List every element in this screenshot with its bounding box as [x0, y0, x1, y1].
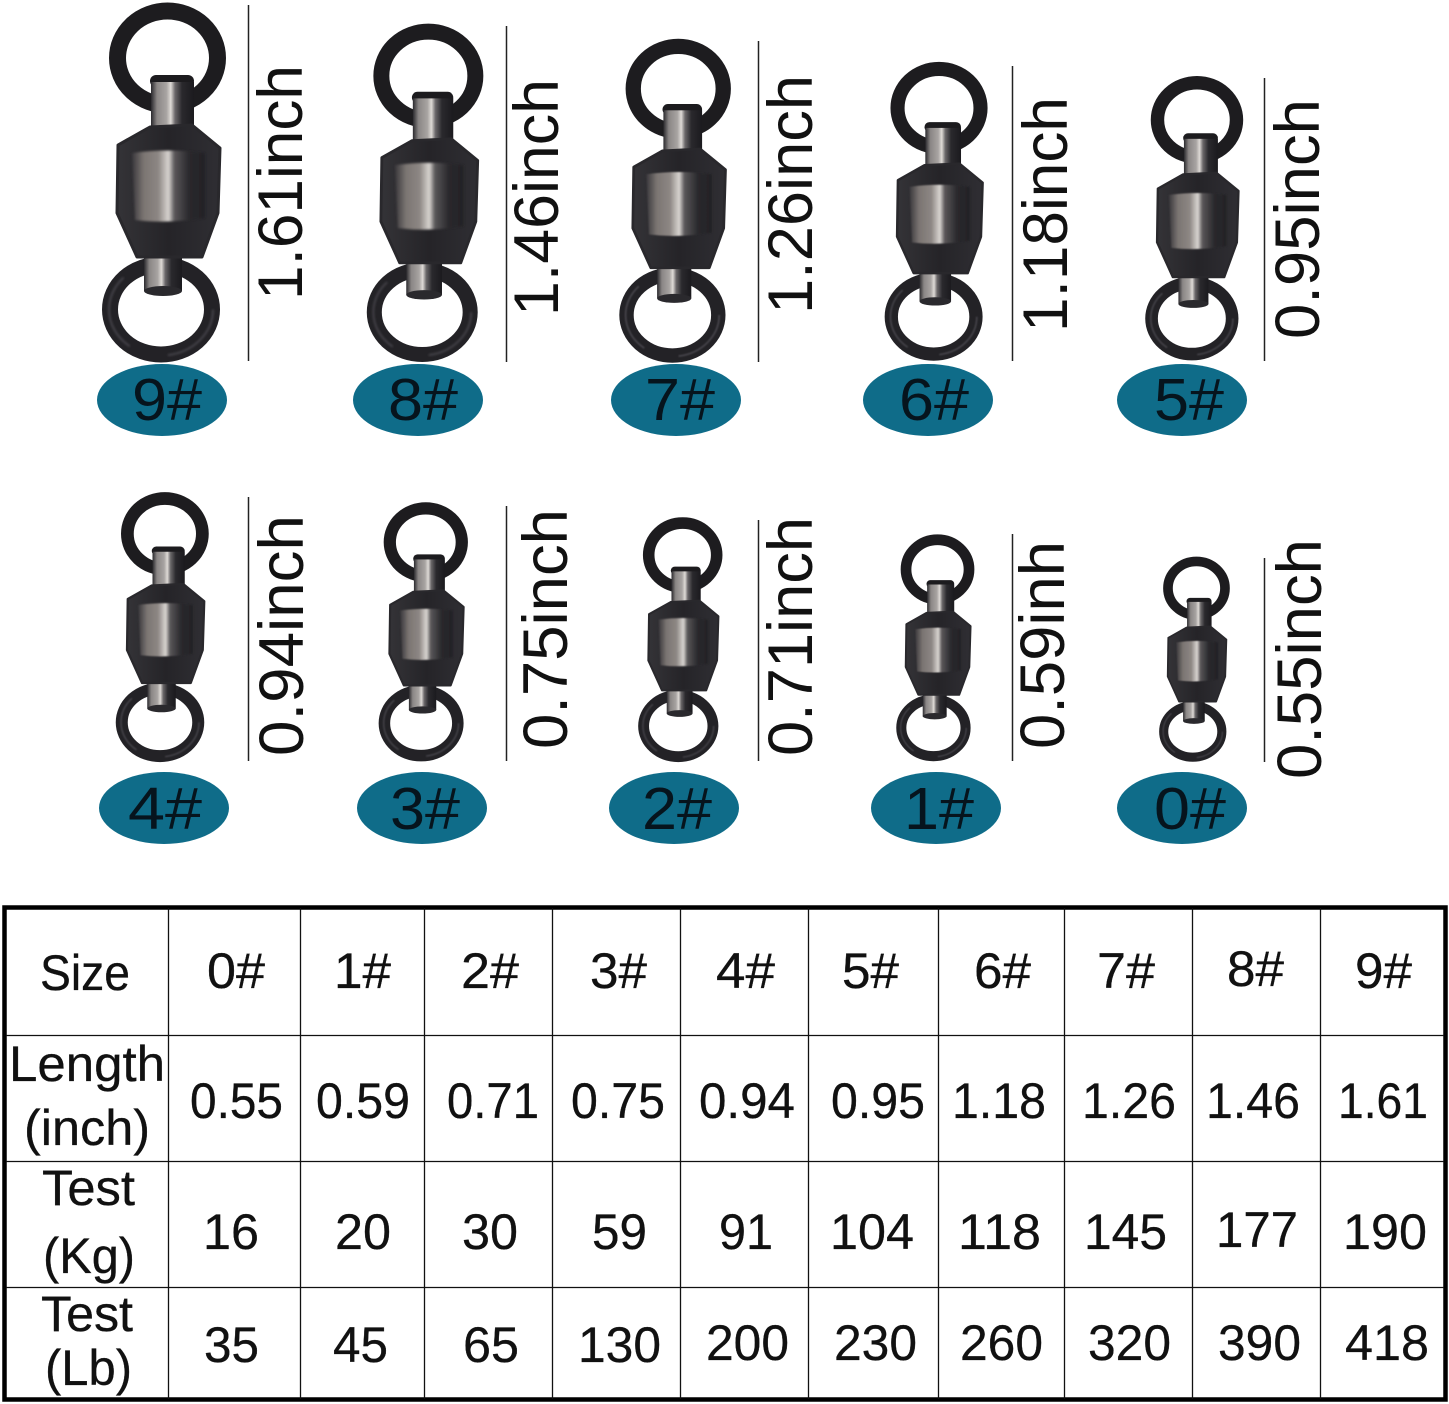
table row: length in inches: 0.75	[571, 1073, 665, 1129]
table row: test in pounds: 320	[1088, 1315, 1171, 1371]
table row: size: 7#	[1097, 943, 1155, 999]
table row: length in inches: 1.26	[1082, 1073, 1176, 1129]
table row: test in pounds: 200	[706, 1315, 789, 1371]
table row: test in pounds: 65	[463, 1317, 519, 1373]
table row: test in pounds: 45	[333, 1317, 388, 1373]
table row: test in pounds: 35	[204, 1317, 259, 1373]
table row: length in inches: 1.46	[1206, 1073, 1300, 1129]
table row: test in kilograms: (Kg)	[43, 1228, 135, 1284]
swivel 9#: image, length line, length label, size tag: 1.61inch	[246, 65, 316, 300]
table row: test in kilograms	[42, 1160, 1427, 1284]
table row: test in pounds: 418	[1345, 1315, 1429, 1371]
swivel 2#: image, length line, length label, size tag: 2#	[642, 776, 712, 842]
swivel 3#: image, length line, length label, size tag: 0.75inch	[511, 509, 581, 749]
table row: length in inches: 0.59	[316, 1073, 410, 1129]
table row: size: 6#	[974, 943, 1031, 999]
swivel 6#: image, length line, length label, size tag: 1.18inch	[1011, 97, 1081, 332]
table row: length in inches: 0.95	[831, 1073, 925, 1129]
table row: length in inches: 0.55	[190, 1073, 283, 1129]
table row: length in inches: (inch)	[24, 1100, 150, 1156]
table row: test in pounds: 260	[960, 1315, 1043, 1371]
swivel 4#: image, length line, length label, size tag	[99, 497, 317, 844]
table row: size: Size	[40, 945, 130, 1001]
swivel 7#: image, length line, length label, size tag	[611, 41, 826, 436]
table row: test in kilograms: 118	[958, 1204, 1041, 1260]
table row: test in pounds: Test	[41, 1286, 133, 1342]
table row: length in inches: 0.94	[699, 1073, 795, 1129]
swivel row two: sizes 4# to 0#	[99, 497, 1335, 844]
swivel 9#: image, length line, length label, size tag: 9#	[132, 367, 202, 433]
table row: test in pounds: 130	[578, 1317, 661, 1373]
specification table	[4, 908, 1446, 1400]
swivel 7#: image, length line, length label, size tag: 7#	[645, 367, 715, 433]
table row: length in inches	[9, 1036, 1428, 1156]
swivel 9#: image, length line, length label, size tag	[97, 5, 316, 436]
swivel 5#: image, length line, length label, size tag: 0.95inch	[1263, 99, 1333, 339]
swivel 8#: image, length line, length label, size tag: 8#	[388, 367, 458, 433]
table row: test in kilograms: 91	[719, 1204, 773, 1260]
swivel 6#: image, length line, length label, size tag	[863, 66, 1081, 436]
table row: size: 9#	[1355, 943, 1412, 999]
table row: test in kilograms: 177	[1216, 1202, 1298, 1258]
table row: length in inches: Length	[9, 1036, 165, 1092]
table row: test in kilograms: Test	[42, 1160, 135, 1216]
swivel 8#: image, length line, length label, size tag	[353, 26, 572, 436]
swivel 6#: image, length line, length label, size tag: 6#	[899, 367, 969, 433]
swivel row one: sizes 9# to 5#	[97, 5, 1333, 436]
swivel 4#: image, length line, length label, size tag: 4#	[128, 776, 202, 842]
table row: test in pounds: 230	[834, 1315, 917, 1371]
table row: size: 4#	[716, 943, 775, 999]
swivel 3#: image, length line, length label, size tag: 3#	[390, 776, 460, 842]
table row: test in kilograms: 20	[335, 1204, 391, 1260]
table row: size: 8#	[1227, 941, 1284, 997]
swivel 4#: image, length line, length label, size tag: 0.94inch	[247, 515, 317, 756]
swivel 1#: image, length line, length label, size tag: 1#	[904, 776, 974, 842]
swivel 7#: image, length line, length label, size tag: 1.26inch	[756, 75, 826, 314]
table row: test in pounds: (Lb)	[45, 1340, 132, 1396]
table row: test in kilograms: 30	[462, 1204, 518, 1260]
swivel 8#: image, length line, length label, size tag: 1.46inch	[502, 79, 572, 316]
swivel 5#: image, length line, length label, size tag	[1117, 78, 1333, 436]
table row: test in kilograms: 59	[592, 1204, 647, 1260]
table row: test in kilograms: 104	[830, 1204, 914, 1260]
swivel 2#: image, length line, length label, size tag: 0.71inch	[756, 517, 826, 756]
swivel 0#: image, length line, length label, size tag	[1117, 539, 1335, 844]
swivel 1#: image, length line, length label, size tag	[871, 534, 1078, 844]
swivel 1#: image, length line, length label, size tag: 0.59inh	[1008, 541, 1078, 749]
swivel 0#: image, length line, length label, size tag: 0.55inch	[1265, 539, 1335, 779]
swivel 2#: image, length line, length label, size tag	[609, 517, 826, 844]
table row: size: 5#	[842, 943, 899, 999]
table row: length in inches: 0.71	[447, 1073, 539, 1129]
table row: size	[40, 941, 1412, 1001]
table row: size: 1#	[334, 943, 391, 999]
table row: size: 0#	[207, 943, 265, 999]
table row: length in inches: 1.18	[952, 1073, 1046, 1129]
table row: test in kilograms: 16	[203, 1204, 259, 1260]
table row: length in inches: 1.61	[1338, 1073, 1428, 1129]
swivel 5#: image, length line, length label, size tag: 5#	[1154, 367, 1224, 433]
table row: test in kilograms: 190	[1343, 1204, 1427, 1260]
table row: test in kilograms: 145	[1084, 1204, 1167, 1260]
swivel 3#: image, length line, length label, size tag	[357, 506, 581, 844]
table row: size: 2#	[461, 943, 519, 999]
table row: test in pounds	[41, 1286, 1429, 1396]
table row: test in pounds: 390	[1218, 1315, 1301, 1371]
table row: size: 3#	[590, 943, 647, 999]
swivel 0#: image, length line, length label, size tag: 0#	[1154, 776, 1226, 842]
